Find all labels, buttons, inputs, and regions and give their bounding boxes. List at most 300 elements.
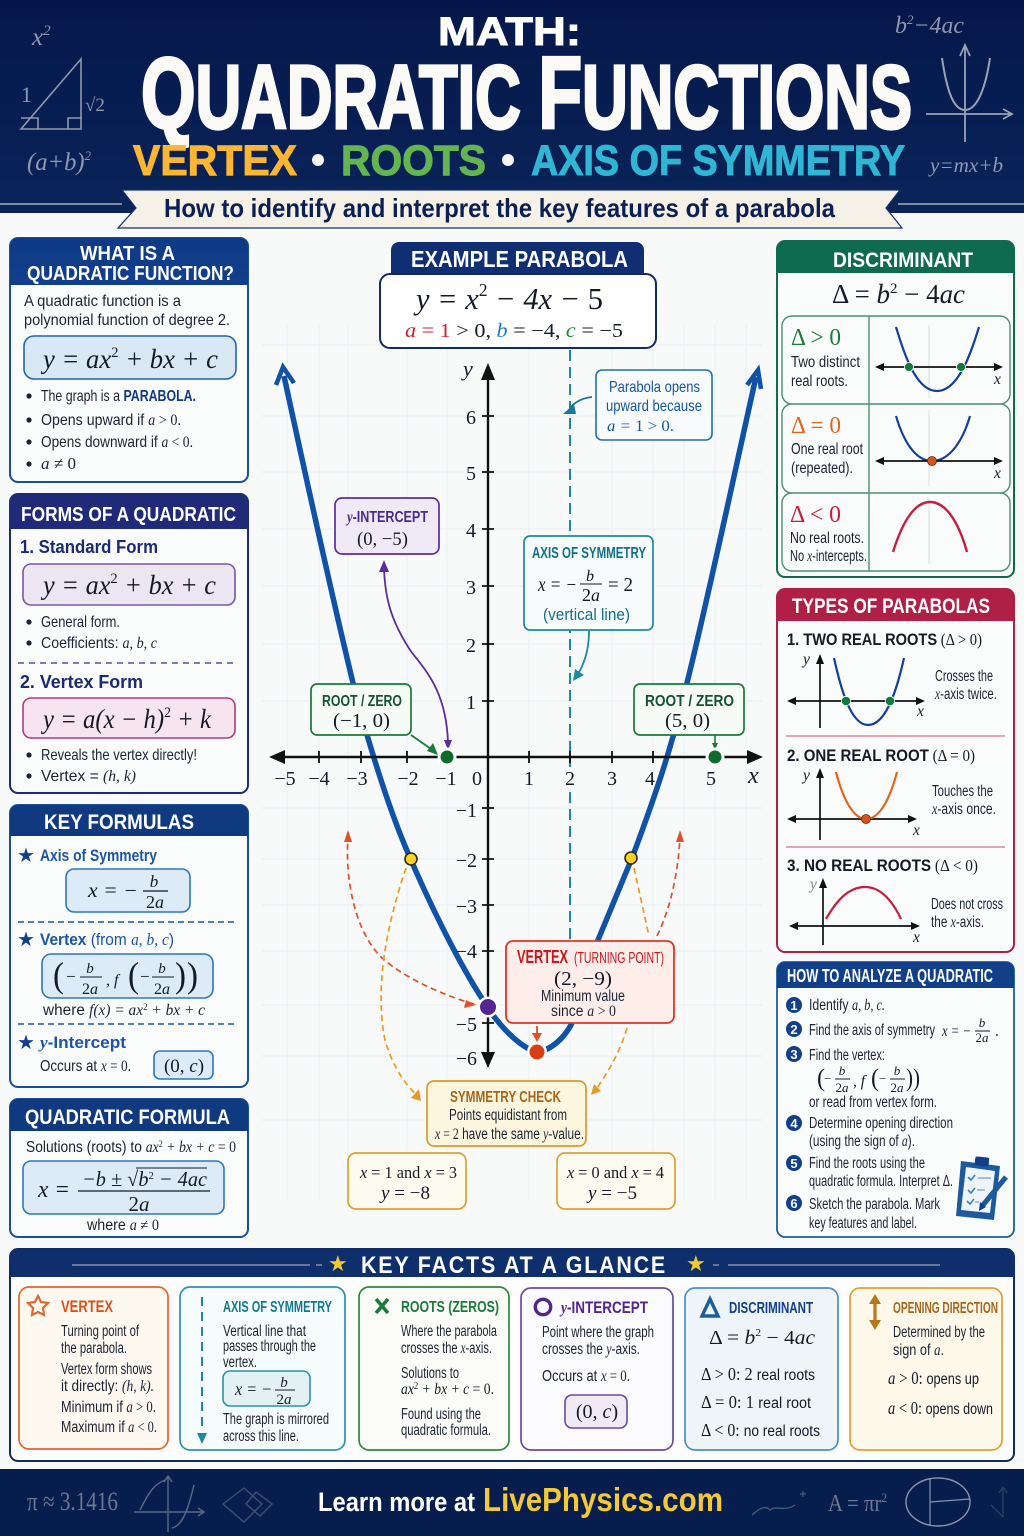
vertex formula: + bx + c <box>148 1002 205 1019</box>
vertex formula <box>17 929 213 1019</box>
footer chalk decorations right <box>752 1478 1007 1526</box>
axis numbers: −4 <box>456 941 477 963</box>
footer chalk decorations right: A = πr <box>828 1491 890 1517</box>
step 3: )) <box>906 1065 920 1092</box>
type 1: Crosses the <box>935 668 993 685</box>
card: vertex: Vertex form shows <box>61 1361 152 1378</box>
vertex formula: ( <box>128 955 139 995</box>
heading: QUADRATIC FUNCTION? <box>27 263 234 285</box>
panel: quadratic formula <box>10 1099 248 1237</box>
card: opening direction: sign of a. <box>893 1342 944 1359</box>
step 4: (using the sign of a). <box>809 1133 915 1150</box>
example parabola equation card: EXAMPLE PARABOLA <box>411 246 628 272</box>
subtitle ribbon: How to identify and interpret the key features of a parabola <box>164 193 835 223</box>
vertex formula: b <box>158 961 166 977</box>
step 6: Sketch the parabola. Mark <box>809 1196 940 1213</box>
panel: forms of a quadratic <box>10 494 248 793</box>
card: vertex: it directly: (h, k). <box>61 1378 154 1395</box>
step 6: 6 <box>790 1196 798 1211</box>
solutions line: + bx + c <box>163 1139 214 1156</box>
solutions line: Solutions (roots) to ax <box>26 1139 160 1156</box>
example: x=1 and x=3: x = 1 and x = 3 <box>359 1163 457 1182</box>
callout: axis of symmetry: AXIS OF SYMMETRY <box>532 545 646 562</box>
example: x=0 and x=4: y = −5 <box>586 1183 637 1204</box>
step 3: b <box>894 1063 901 1078</box>
card: opening direction: a > 0: opens up <box>888 1368 979 1388</box>
decorative chalk formulas left: x <box>32 24 43 51</box>
case: no roots: Δ < 0 <box>790 502 841 528</box>
step 3: − <box>879 1071 886 1086</box>
callout: y-intercept <box>335 498 452 750</box>
case: one root: (repeated). <box>791 460 853 477</box>
decorative chalk formulas right <box>895 12 1012 177</box>
card: roots: 2 <box>414 1381 418 1392</box>
callout: root left: (−1, 0) <box>333 710 390 732</box>
type 3 <box>787 856 1003 946</box>
step 3: ( <box>871 1065 879 1092</box>
subtitle keywords: ROOTS <box>341 137 486 185</box>
bullets: a ≠ 0 <box>41 454 76 473</box>
panel: key facts at a glance <box>10 1249 1014 1461</box>
heading <box>10 1099 248 1131</box>
axis numbers: x <box>747 763 759 789</box>
vertex formula: ★ <box>17 929 35 951</box>
panel: key formulas <box>10 805 248 1087</box>
formula box: 2a <box>128 1192 150 1216</box>
formula box: + bx + c <box>119 344 218 374</box>
card: y-intercept: Point where the graph <box>542 1324 654 1341</box>
example parabola equation card: a = 1 > 0, b = −4, c = −5 <box>405 320 623 342</box>
card: discriminant: Δ = 0: 1 real root <box>701 1392 812 1412</box>
heading <box>777 589 1014 621</box>
step 3: 2a <box>836 1080 849 1095</box>
footer chalk decorations right: 2 <box>881 1490 887 1505</box>
vertex formula: − <box>140 967 150 986</box>
type 2 <box>787 746 996 840</box>
callout: root right: (5, 0) <box>665 710 710 732</box>
vertex formula: − <box>66 967 76 986</box>
icon: clipboard with pencil <box>956 1156 1006 1220</box>
card: axis of symmetry: b <box>280 1375 288 1391</box>
formula box: −b ± √b <box>82 1167 151 1191</box>
intro text <box>24 293 230 329</box>
step 3: Find the vertex: <box>809 1047 885 1064</box>
bullets: Opens downward if a < 0. <box>41 434 193 451</box>
step 3: 2a <box>890 1080 904 1095</box>
card: roots <box>359 1287 509 1450</box>
formula box: − 4ac <box>154 1167 208 1191</box>
intro text: polynomial function of degree 2. <box>24 312 230 329</box>
callout: parabola opens upward: a = 1 > 0. <box>607 418 674 435</box>
call to action <box>318 1481 723 1518</box>
case: two roots: Δ > 0 <box>791 325 841 351</box>
axis of symmetry formula <box>17 845 190 912</box>
step 3: ( <box>817 1065 825 1092</box>
call to action: LivePhysics.com <box>483 1481 723 1518</box>
axis numbers: 1 <box>524 768 534 790</box>
card: discriminant: Δ = b <box>709 1327 754 1349</box>
axis numbers: −1 <box>435 768 457 790</box>
heading: FORMS OF A QUADRATIC <box>21 504 236 526</box>
callout: root left <box>311 684 438 755</box>
solutions line: = 0 <box>214 1139 236 1156</box>
axis numbers: −2 <box>456 850 477 872</box>
type 2: x-axis once. <box>931 801 996 818</box>
step 5: 5 <box>790 1156 798 1171</box>
callout: root right: ROOT / ZERO <box>645 693 734 710</box>
callout: y-intercept: (0, −5) <box>357 529 408 550</box>
standard form <box>20 537 235 652</box>
type 2: Touches the <box>932 783 993 800</box>
heading: KEY FORMULAS <box>44 811 194 834</box>
axis numbers: 3 <box>466 577 476 599</box>
card: roots: ax <box>401 1381 416 1398</box>
type 3: 3. NO REAL ROOTS (Δ < 0) <box>787 856 978 875</box>
footer chalk decorations left: π ≈ 3.1416 <box>27 1487 118 1516</box>
card: y-intercept: Occurs at x = 0. <box>542 1368 630 1385</box>
step 2: 2a <box>976 1030 989 1045</box>
note: where a ≠ 0 <box>86 1217 159 1234</box>
card: discriminant <box>685 1288 838 1450</box>
graph background grid <box>262 325 762 1200</box>
axis numbers: −3 <box>346 768 368 790</box>
y-intercept formula: Occurs at x = 0. <box>40 1058 131 1075</box>
example parabola equation card: 2 <box>479 280 488 300</box>
axis of symmetry formula: b <box>150 872 158 891</box>
step 2 <box>786 1015 999 1045</box>
case: two roots <box>791 325 1003 398</box>
subtitle keywords <box>133 137 905 185</box>
case: one root <box>791 410 1003 486</box>
step 5: Find the roots using the <box>809 1155 925 1172</box>
intro text: A quadratic function is a <box>24 293 181 310</box>
heading: QUADRATIC FORMULA <box>25 1106 230 1129</box>
axis numbers: −3 <box>456 896 477 918</box>
decorative chalk formulas left <box>21 23 105 176</box>
callout: axis of symmetry <box>524 536 653 681</box>
axis numbers: 1 <box>466 692 476 714</box>
type 1: 1. TWO REAL ROOTS (Δ > 0) <box>787 630 982 649</box>
heading: WHAT IS A <box>80 243 175 265</box>
case: two roots: real roots. <box>791 373 848 390</box>
callout: symmetry check: SYMMETRY CHECK <box>450 1089 561 1106</box>
vertex formula: 2 <box>143 1002 148 1012</box>
step 6: key features and label. <box>809 1215 917 1232</box>
callout: symmetry check: Points equidistant from <box>449 1107 567 1124</box>
axis of symmetry formula: Axis of Symmetry <box>40 847 158 865</box>
axis numbers: 4 <box>645 768 655 790</box>
vertex form: y = a(x − h) <box>43 704 175 734</box>
vertex form: Reveals the vertex directly! <box>41 747 197 764</box>
axis numbers: −5 <box>274 768 296 790</box>
vertex formula: ( <box>53 955 64 995</box>
heading <box>10 238 248 285</box>
step 3: 3 <box>790 1047 798 1062</box>
discriminant formula: ac <box>940 279 965 309</box>
card: vertex: the parabola. <box>61 1340 127 1357</box>
vertex form: 2 <box>164 705 171 721</box>
card: vertex: Maximum if a < 0. <box>61 1419 157 1436</box>
standard form: y = ax <box>43 570 112 600</box>
case: no roots: No real roots. <box>790 530 864 547</box>
card: axis of symmetry: across this line. <box>223 1428 299 1445</box>
decorative chalk formulas left: 2 <box>43 23 51 39</box>
bullets: The graph is a PARABOLA. <box>41 388 196 405</box>
subtitle keywords: VERTEX <box>133 137 297 185</box>
discriminant formula: Δ = b <box>832 279 890 309</box>
vertex formula: 2a <box>82 981 98 998</box>
y-intercept formula: y-Intercept <box>38 1033 127 1052</box>
y-intercept formula: (0, c) <box>164 1056 204 1077</box>
card: roots: Found using the <box>401 1406 481 1423</box>
decorative chalk formulas right: b <box>895 13 907 39</box>
case: one root: x <box>993 465 1001 482</box>
step 3: , f <box>853 1073 868 1090</box>
card: roots: + bx + c <box>418 1381 469 1398</box>
example: x=0 and x=4 <box>557 1153 675 1209</box>
y-intercept formula <box>17 1032 213 1079</box>
callout: vertex: Minimum value <box>541 988 625 1005</box>
card: vertex <box>19 1287 168 1449</box>
callout: parabola opens upward <box>563 370 712 440</box>
axis numbers: −2 <box>397 768 419 790</box>
axes <box>269 363 763 1068</box>
step 2: . <box>995 1023 999 1040</box>
card: axis of symmetry: The graph is mirrored <box>223 1411 329 1428</box>
step 3 <box>786 1046 937 1111</box>
heading: ★ <box>686 1251 706 1276</box>
card: y-intercept: y-INTERCEPT <box>559 1298 648 1317</box>
formula box: y = ax <box>43 344 112 374</box>
footer chalk decorations left <box>27 1476 272 1532</box>
step 2: x = − <box>941 1023 971 1040</box>
callout: symmetry check <box>427 1081 586 1146</box>
callout: y-intercept: y-INTERCEPT <box>345 509 428 526</box>
axis of symmetry dashed line <box>569 350 571 1000</box>
decorative chalk formulas right: −4ac <box>913 13 964 39</box>
card: roots: crosses the x-axis. <box>401 1340 492 1357</box>
callout: symmetry check: x = 2 have the same y-value. <box>434 1126 584 1143</box>
axis numbers: 3 <box>607 768 617 790</box>
heading <box>10 805 248 836</box>
axis numbers: −6 <box>456 1048 477 1070</box>
decorative chalk formulas left: (a+b) <box>27 149 86 176</box>
axis of symmetry formula: x = − <box>87 880 138 902</box>
step 4: Determine opening direction <box>809 1115 953 1132</box>
discriminant formula: − 4 <box>897 279 940 309</box>
callout: root left: ROOT / ZERO <box>322 693 402 710</box>
discriminant formula: 2 <box>890 281 897 297</box>
decorative chalk formulas left: √2 <box>85 95 105 116</box>
formula box: 2 <box>148 1170 154 1182</box>
card: opening direction: a < 0: opens down <box>888 1398 993 1418</box>
card: discriminant: ac <box>795 1327 815 1349</box>
callout: vertex: (2, −9) <box>554 968 612 990</box>
card: roots: quadratic formula. <box>401 1422 491 1439</box>
panel: what is a quadratic function <box>10 238 248 482</box>
card: vertex: Turning point of <box>61 1323 139 1340</box>
main chart <box>269 350 763 1070</box>
step 4: 4 <box>790 1116 798 1131</box>
type 2: y <box>801 767 810 784</box>
y-intercept formula: ★ <box>17 1032 35 1054</box>
card: opening direction <box>850 1288 1002 1450</box>
step 3: − <box>824 1071 831 1086</box>
heading <box>10 494 248 529</box>
axis numbers: 5 <box>466 463 476 485</box>
axis numbers: −1 <box>456 800 477 822</box>
axis of symmetry formula: ★ <box>17 845 35 867</box>
standard form: Coefficients: a, b, c <box>41 635 157 652</box>
bullets: Opens upward if a > 0. <box>41 412 181 429</box>
formula box <box>23 1161 224 1216</box>
callout: axis of symmetry: x = − <box>537 574 577 596</box>
callout: vertex <box>506 941 674 1042</box>
card: axis of symmetry <box>180 1287 345 1450</box>
vertex formula: ) <box>175 955 186 995</box>
dashed symmetry arrows <box>344 830 684 1101</box>
case: two roots: Two distinct <box>791 354 861 371</box>
vertex form: 2. Vertex Form <box>20 672 143 692</box>
card: opening direction: Determined by the <box>893 1324 985 1341</box>
standard form: 2 <box>110 571 118 587</box>
case: no roots <box>790 498 967 565</box>
card: y-intercept: crosses the y-axis. <box>542 1341 640 1358</box>
card: discriminant: Δ > 0: 2 real roots <box>701 1364 815 1384</box>
callout: vertex: VERTEX <box>517 947 568 967</box>
vertex formula: ) <box>187 955 198 995</box>
axis numbers: −4 <box>308 768 330 790</box>
step 1: 1 <box>790 998 798 1013</box>
bullets <box>26 388 196 473</box>
callout: root right <box>634 684 744 750</box>
case: no roots: No x-intercepts. <box>790 548 867 565</box>
vertex formula: 2a <box>154 981 170 998</box>
callout: axis of symmetry: (vertical line) <box>543 605 630 624</box>
header band <box>0 0 1024 228</box>
step 3: b <box>839 1063 846 1078</box>
axis numbers: 2 <box>565 768 575 790</box>
vertex formula: where f(x) = ax <box>43 1002 143 1019</box>
vertex formula: , f <box>106 972 121 989</box>
card: axis of symmetry: AXIS OF SYMMETRY <box>223 1299 332 1316</box>
card: vertex: Minimum if a > 0. <box>61 1399 156 1416</box>
decorative chalk formulas right: y=mx+b <box>928 153 1003 177</box>
card: axis of symmetry: Vertical line that <box>223 1323 307 1340</box>
vertex formula: Vertex (from a, b, c) <box>40 930 174 949</box>
callout: parabola opens upward: upward because <box>606 398 702 415</box>
type 2: x <box>912 822 920 839</box>
card: axis of symmetry: vertex. <box>223 1354 257 1371</box>
card: axis of symmetry: 2a <box>276 1392 292 1408</box>
type 3: y <box>808 876 817 893</box>
decorative chalk formulas left: 2 <box>85 148 91 163</box>
axis numbers: 4 <box>466 520 476 542</box>
type 2: 2. ONE REAL ROOT (Δ = 0) <box>787 746 975 765</box>
case: two roots: x <box>993 371 1001 388</box>
panel: how to analyze <box>777 962 1014 1237</box>
axis numbers: 0 <box>472 768 482 790</box>
vertex formula: b <box>86 961 94 977</box>
title: MATH: <box>438 10 581 54</box>
step 5 <box>786 1155 953 1190</box>
key points on parabola <box>405 748 724 1062</box>
card: roots: ROOTS (ZEROS) <box>401 1299 499 1316</box>
type 1 <box>787 630 997 728</box>
callout: axis of symmetry: b <box>586 568 594 585</box>
call to action: Learn more at <box>318 1487 475 1517</box>
card: roots: Where the parabola <box>401 1323 497 1340</box>
card: y-intercept <box>521 1288 673 1450</box>
card: y-intercept: (0, c) <box>576 1401 618 1423</box>
axis of symmetry formula: 2a <box>146 892 164 912</box>
standard form: General form. <box>41 614 120 631</box>
example parabola equation card <box>380 242 656 348</box>
card: discriminant: − 4 <box>761 1327 795 1349</box>
case: one root: One real root <box>791 441 864 458</box>
step 1: Identify a, b, c. <box>809 997 885 1014</box>
axis numbers: 6 <box>466 407 476 429</box>
axis numbers <box>274 356 759 1070</box>
footer <box>0 1469 1024 1536</box>
type 1: x-axis twice. <box>934 686 997 703</box>
card: axis of symmetry: x = − <box>234 1379 272 1399</box>
axis numbers: y <box>461 356 473 381</box>
vertex form: Vertex = (h, k) <box>41 768 136 785</box>
card: roots: Solutions to <box>401 1365 459 1382</box>
case: one root: Δ = 0 <box>791 413 841 439</box>
example parabola equation card: − 4x − 5 <box>495 281 603 316</box>
heading: KEY FACTS AT A GLANCE <box>361 1252 667 1279</box>
type 3: x <box>912 929 920 946</box>
decorative chalk formulas right: 2 <box>907 12 914 27</box>
example: x=1 and x=3 <box>348 1153 466 1209</box>
decorative chalk formulas left: 1 <box>21 82 32 107</box>
type 3: the x-axis. <box>931 914 984 931</box>
callout: axis of symmetry: = 2 <box>608 574 633 596</box>
callout: parabola opens upward: Parabola opens <box>609 379 700 396</box>
example: x=1 and x=3: y = −8 <box>379 1183 430 1204</box>
vertex form: + k <box>171 704 212 734</box>
example parabola equation card: y = x <box>416 281 480 316</box>
axis numbers: 5 <box>706 768 716 790</box>
solutions line: 2 <box>159 1139 163 1149</box>
panel: discriminant <box>777 241 1014 577</box>
card: discriminant: Δ < 0: no real roots <box>701 1420 820 1440</box>
heading: DISCRIMINANT <box>833 249 973 272</box>
card: discriminant: DISCRIMINANT <box>729 1300 813 1317</box>
callout: vertex: since a > 0 <box>551 1003 616 1020</box>
panel: types of parabolas <box>777 589 1014 952</box>
callout: vertex: (TURNING POINT) <box>574 950 664 967</box>
step 3: or read from vertex form. <box>809 1094 937 1111</box>
formula box: 2 <box>111 345 119 361</box>
step 6 <box>786 1195 940 1232</box>
standard form: + bx + c <box>118 570 216 600</box>
standard form: 1. Standard Form <box>20 537 158 557</box>
subtitle keywords: AXIS OF SYMMETRY <box>531 137 905 185</box>
step 5: quadratic formula. Interpret Δ. <box>809 1173 953 1190</box>
callout: axis of symmetry: 2a <box>582 585 600 605</box>
step 2: Find the axis of symmetry <box>809 1022 935 1039</box>
axis numbers: −5 <box>456 1014 477 1036</box>
step 4 <box>786 1115 953 1150</box>
heading <box>10 1249 1014 1279</box>
formula box <box>24 336 236 379</box>
heading: ★ <box>328 1251 348 1276</box>
heading <box>777 241 1014 273</box>
card: axis of symmetry: passes through the <box>223 1338 316 1355</box>
